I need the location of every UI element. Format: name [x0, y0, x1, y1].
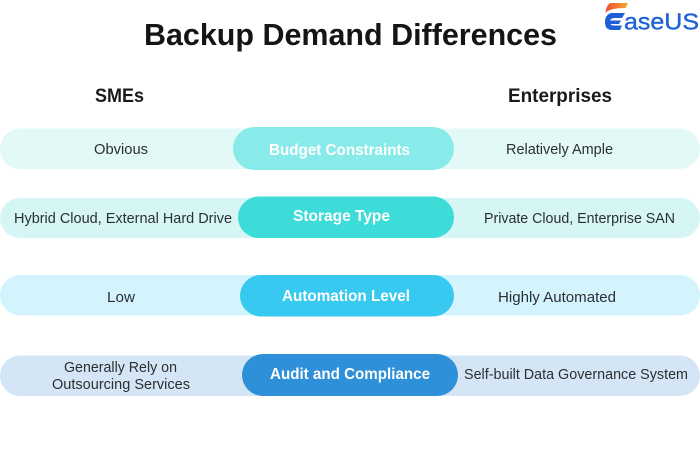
title: Backup Demand Differences [144, 18, 557, 52]
row: Audit and Compliance: Self-built Data Governance System [464, 366, 688, 383]
column heading: Enterprises: Enterprises [508, 85, 612, 107]
row: Audit and Compliance: Generally Rely on [64, 359, 177, 376]
row: Automation Level: Highly Automated [498, 289, 616, 306]
row: Storage Type: Private Cloud, Enterprise SAN [484, 210, 675, 227]
row: Audit and Compliance [0, 354, 700, 396]
row: Storage Type [0, 196, 700, 238]
row: Automation Level: Automation Level [282, 288, 410, 305]
row: Budget Constraints: Obvious [94, 141, 148, 158]
row: Automation Level [0, 275, 700, 316]
logo: EaseUS: aseUS [624, 8, 699, 34]
column heading: SMEs: SMEs [95, 85, 144, 107]
row: Storage Type: Hybrid Cloud, External Hard Drive [14, 210, 232, 227]
logo: EaseUS [605, 3, 699, 34]
row: Audit and Compliance: Outsourcing Services [52, 376, 190, 393]
row: Budget Constraints: Relatively Ample [506, 141, 613, 158]
row: Audit and Compliance: Audit and Compliance [270, 366, 430, 383]
row: Automation Level: Low [107, 289, 135, 306]
row: Budget Constraints: Budget Constraints [269, 142, 410, 159]
row: Budget Constraints [0, 127, 700, 170]
row: Storage Type: Storage Type [293, 208, 390, 225]
